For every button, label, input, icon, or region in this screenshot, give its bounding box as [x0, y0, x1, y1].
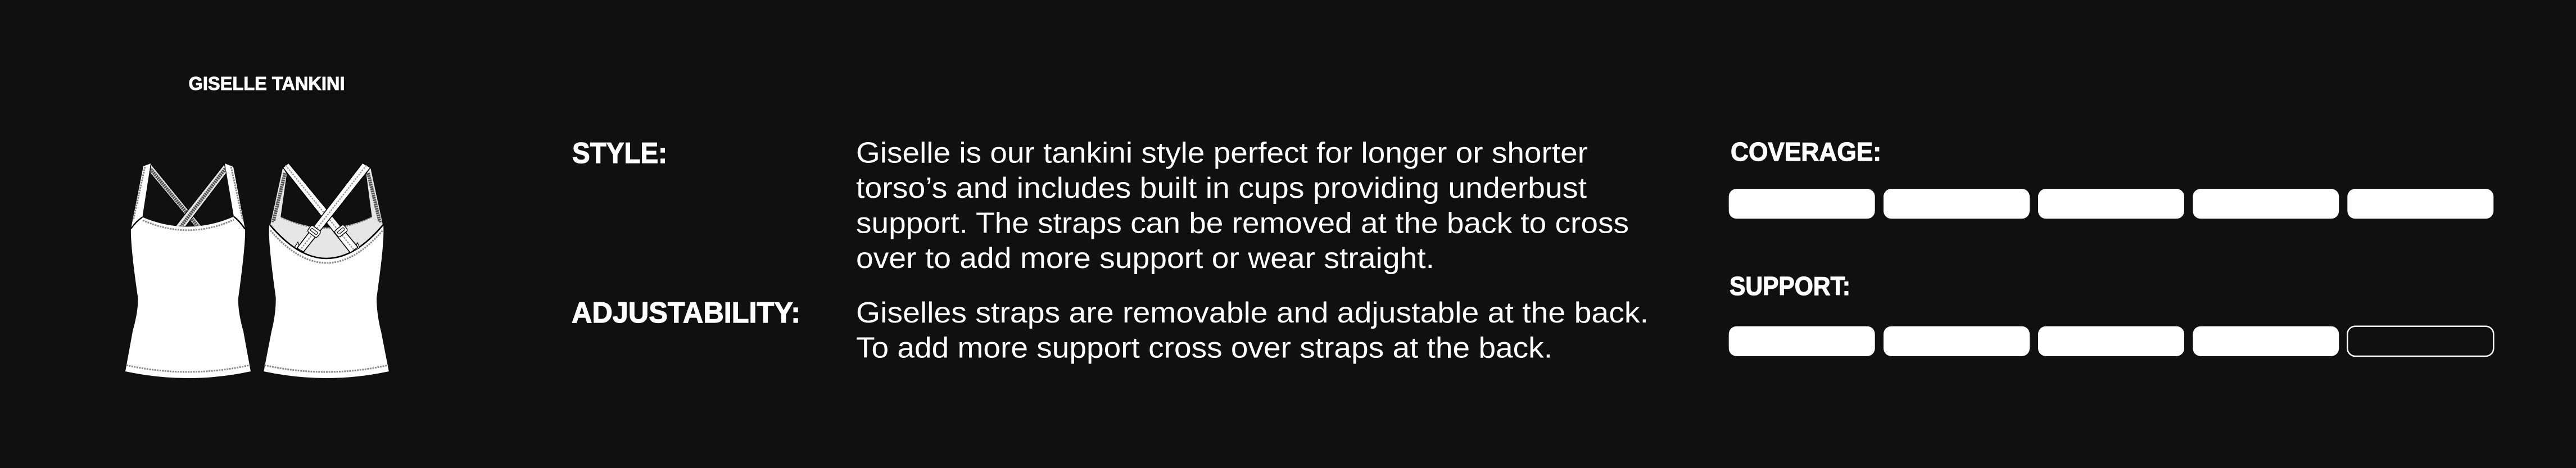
heading: coverage: COVERAGE:: [1731, 137, 1881, 166]
lining and hem stitching: [264, 217, 388, 372]
text block: style description: [856, 137, 1629, 275]
text block: style description: Giselle is our tankini style perfect for longer or shorter: [856, 137, 1588, 170]
strap seam lines: [131, 217, 245, 229]
inner lining: [270, 217, 383, 258]
rating: coverage 5 of 5: [1729, 189, 2493, 219]
front body and straps: [125, 163, 251, 378]
title: Giselle Tankini: GISELLE TANKINI: [189, 73, 345, 94]
cup detail: [295, 242, 360, 252]
back body: [264, 225, 389, 378]
heading: adjustability: ADJUSTABILITY:: [572, 297, 800, 329]
icon: tankini back view: [264, 163, 389, 378]
heading: support: SUPPORT:: [1730, 271, 1850, 301]
stitching: [126, 167, 250, 372]
text block: adjustability description: Giselles straps are removable and adjustable at the back.: [856, 297, 1649, 329]
heading: style: STYLE:: [572, 137, 667, 170]
crossing strap right: [297, 163, 370, 252]
neckline edge: [270, 225, 383, 258]
icon: tankini front view: [125, 163, 251, 378]
text block: style description: torso’s and includes built in cups providing underbust: [856, 172, 1587, 205]
text block: adjustability description: [856, 297, 1649, 364]
crossing strap left: [283, 163, 358, 253]
side straps: [270, 167, 383, 225]
crossed back straps seen through front: [150, 164, 227, 227]
strap buckles: [307, 224, 348, 238]
text block: style description: over to add more support or wear straight.: [856, 242, 1434, 275]
text block: style description: support. The straps can be removed at the back to cross: [856, 207, 1629, 239]
rating: support 4 of 5: [1729, 326, 2493, 356]
text block: adjustability description: To add more support cross over straps at the back.: [856, 331, 1552, 364]
